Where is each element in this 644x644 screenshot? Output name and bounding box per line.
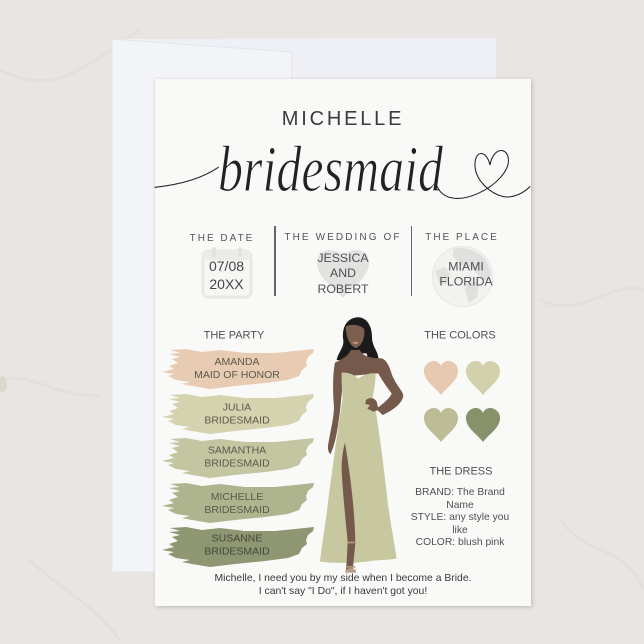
couple names: JESSICA [317, 250, 369, 264]
heading: the wedding of: THE WEDDING OF [284, 232, 402, 243]
party name: michelle: MICHELLE [211, 490, 263, 502]
party name: samantha: BRIDESMAID [204, 457, 270, 469]
swatch: samantha [162, 438, 314, 478]
place text [439, 259, 493, 288]
swatch: susanne [162, 527, 314, 567]
divider [410, 226, 412, 296]
divider [274, 226, 276, 296]
date text: 07/08 [209, 258, 244, 274]
heading: the dress: THE DRESS [430, 466, 492, 478]
party name: julia: BRIDESMAID [204, 414, 270, 426]
date text: 20XX [209, 276, 244, 292]
dress details: BRAND: The Brand [415, 487, 505, 498]
dress details [411, 487, 509, 548]
illustration: woman in sage dress [320, 317, 404, 573]
color heart: sage light [424, 408, 458, 442]
party name: susanne: BRIDESMAID [204, 545, 270, 557]
closing message: Michelle, I need you by my side when I become a Bride. [214, 572, 472, 584]
swatch: michelle [162, 483, 314, 523]
party name: samantha [204, 444, 270, 469]
swatch: amanda [162, 349, 314, 389]
couple names [317, 250, 369, 295]
paint swatches: party list [162, 349, 314, 567]
party name: susanne [204, 532, 270, 557]
icon: heart [317, 250, 369, 298]
couple names: ROBERT [317, 281, 369, 295]
party name: susanne: SUSANNE [212, 532, 262, 544]
party name: amanda [194, 356, 280, 380]
couple names: AND [330, 266, 356, 280]
swatch: julia [162, 394, 314, 434]
closing message [214, 572, 472, 596]
dress details: like [452, 524, 468, 535]
icon: calendar [202, 247, 252, 298]
place text: MIAMI [448, 259, 484, 273]
party name: julia [204, 402, 270, 426]
party name: samantha: SAMANTHA [208, 444, 266, 456]
script title: bridesmaid with flourish and heart: bridesmaid [218, 133, 444, 206]
name heading: MICHELLE [282, 108, 404, 130]
closing message: I can't say "I Do", if I haven't got you! [259, 586, 427, 596]
dress details: STYLE: any style you [411, 512, 509, 523]
icon: globe [432, 246, 493, 307]
heading: the place: THE PLACE [425, 232, 499, 243]
card panel [155, 79, 531, 606]
party name: amanda: MAID OF HONOR [194, 368, 280, 380]
heading: the date: THE DATE [190, 233, 254, 244]
dress details: Name [446, 499, 474, 510]
heading: the colors: THE COLORS [424, 330, 496, 342]
place text: FLORIDA [439, 274, 493, 288]
color heart: blush [424, 361, 458, 395]
party name: julia: JULIA [223, 402, 251, 414]
dress details: COLOR: blush pink [416, 537, 504, 548]
color heart: sage dark [466, 408, 500, 442]
heading: the party: THE PARTY [204, 329, 264, 341]
party name: amanda: AMANDA [215, 356, 259, 368]
party name: michelle [204, 490, 270, 516]
party name: michelle: BRIDESMAID [204, 504, 270, 516]
palette hearts [424, 361, 500, 442]
color heart: sand [466, 361, 500, 395]
date text [209, 258, 244, 292]
